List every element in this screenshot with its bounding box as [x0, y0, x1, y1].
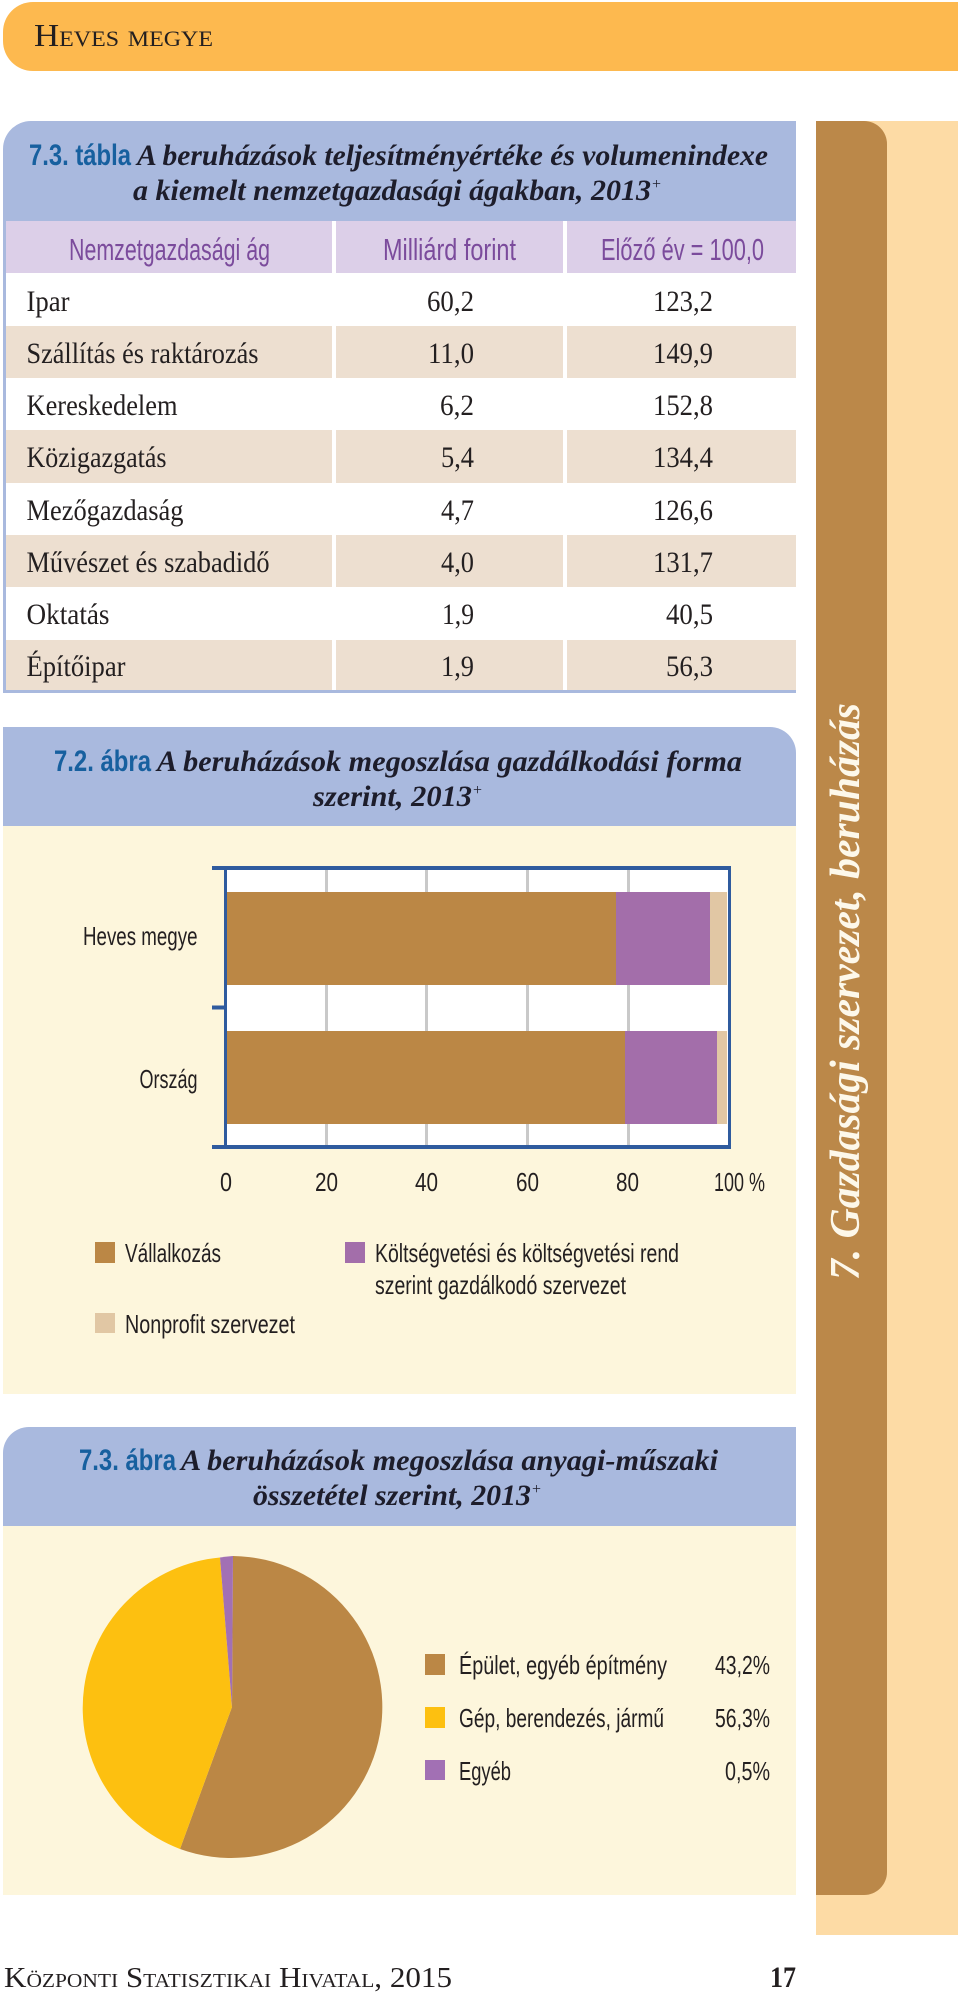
figure 7.2 background — [3, 826, 796, 1394]
bar: Heves megye — [227, 892, 727, 985]
category labels: Ország — [140, 1064, 198, 1094]
figure 7.3 title panel: összetétel szerint, 2013 — [253, 1479, 531, 1512]
chart axes frame — [212, 866, 731, 1149]
table rows: 134,4 — [653, 441, 713, 474]
x axis labels: 20 — [315, 1167, 338, 1197]
legend: Vállalkozás — [125, 1238, 221, 1268]
figure 7.2 title panel: + — [473, 782, 482, 799]
category labels: Heves megye — [83, 921, 198, 951]
footer — [4, 1961, 796, 1992]
table rows: 4,0 — [441, 546, 474, 579]
figure 7.2 title panel: szerint, 2013 — [312, 780, 472, 813]
table rows: 5,4 — [441, 441, 474, 474]
x axis labels: 100 % — [714, 1167, 765, 1197]
table rows: Közigazgatás — [26, 441, 166, 474]
table rows: 149,9 — [653, 337, 713, 370]
figure 7.3 title panel: A beruházások megoszlása anyagi-műszaki — [179, 1444, 719, 1477]
sidebar chapter title: 7. Gazdasági szervezet, beruházás — [823, 703, 869, 1280]
pie legend: Egyéb — [459, 1756, 511, 1786]
page header band — [3, 2, 958, 71]
table rows — [26, 285, 713, 683]
panel: figure 7.3 — [3, 1427, 796, 1895]
table rows: 131,7 — [653, 546, 713, 579]
figure 7.3 background — [3, 1526, 796, 1895]
table rows: 1,9 — [442, 598, 474, 631]
table rows: 56,3 — [666, 650, 713, 683]
table rows: Építőipar — [26, 650, 126, 683]
x axis labels: 0 — [220, 1167, 232, 1197]
table rows: 6,2 — [440, 389, 474, 422]
legend: szerint gazdálkodó szervezet — [375, 1270, 627, 1300]
figure 7.2 title panel: 7.2. ábra — [54, 745, 151, 778]
header text: Heves megye — [34, 17, 213, 53]
table rows: 152,8 — [653, 389, 713, 422]
table rows: 123,2 — [653, 285, 713, 318]
table header row: Előző év = 100,0 — [601, 232, 764, 267]
table rows: Mezőgazdaság — [26, 494, 184, 527]
x axis labels — [220, 1167, 765, 1197]
table rows: Művészet és szabadidő — [26, 546, 270, 579]
table title panel: a kiemelt nemzetgazdasági ágakban, 2013 — [133, 174, 651, 207]
figure 7.3 title panel: + — [532, 1481, 541, 1498]
table 7.3 — [3, 121, 796, 693]
x axis labels: 60 — [516, 1167, 539, 1197]
sidebar — [816, 121, 958, 1935]
bar: Ország — [227, 1031, 727, 1124]
table title panel: A beruházások teljesítményértéke és volumenindexe — [135, 139, 768, 172]
sidebar tab — [816, 121, 887, 1895]
table rows: Kereskedelem — [26, 389, 178, 422]
row shading — [6, 326, 796, 690]
panel: figure 7.2 — [3, 727, 796, 1394]
figure 7.3 title panel — [3, 1427, 796, 1526]
table header row: Nemzetgazdasági ág — [69, 232, 270, 267]
figure 7.2 title panel: A beruházások megoszlása gazdálkodási forma — [155, 745, 742, 778]
legend: Nonprofit szervezet — [125, 1309, 296, 1339]
x axis labels: 80 — [616, 1167, 639, 1197]
table rows: 11,0 — [428, 337, 474, 370]
figure 7.3 title panel: 7.3. ábra — [79, 1444, 176, 1477]
table frame — [3, 221, 796, 693]
table title panel: 7.3. tábla — [29, 139, 131, 172]
stacked bar chart — [83, 866, 765, 1197]
pie legend: 56,3% — [715, 1703, 770, 1733]
pie chart — [83, 1556, 382, 1858]
table rows: 1,9 — [441, 650, 474, 683]
table header row: Milliárd forint — [383, 232, 516, 267]
x axis labels: 40 — [415, 1167, 438, 1197]
table header row — [6, 221, 796, 273]
table title panel — [3, 121, 796, 221]
table rows: 4,7 — [441, 494, 474, 527]
table rows: 126,6 — [653, 494, 713, 527]
table rows: Ipar — [26, 285, 70, 318]
table rows: 40,5 — [666, 598, 713, 631]
category labels — [83, 921, 198, 1094]
pie legend: Épület, egyéb építmény — [459, 1650, 667, 1680]
table rows: 60,2 — [427, 285, 474, 318]
table title panel: + — [652, 176, 661, 193]
table rows: Oktatás — [26, 598, 110, 631]
legend: Költségvetési és költségvetési rend — [375, 1238, 679, 1268]
legend — [95, 1238, 679, 1339]
figure 7.2 title panel — [3, 727, 796, 826]
pie legend: 43,2% — [715, 1650, 770, 1680]
pie legend: 0,5% — [725, 1756, 770, 1786]
pie legend — [425, 1650, 770, 1786]
table rows: Szállítás és raktározás — [26, 337, 258, 370]
pie legend: Gép, berendezés, jármű — [459, 1703, 664, 1733]
